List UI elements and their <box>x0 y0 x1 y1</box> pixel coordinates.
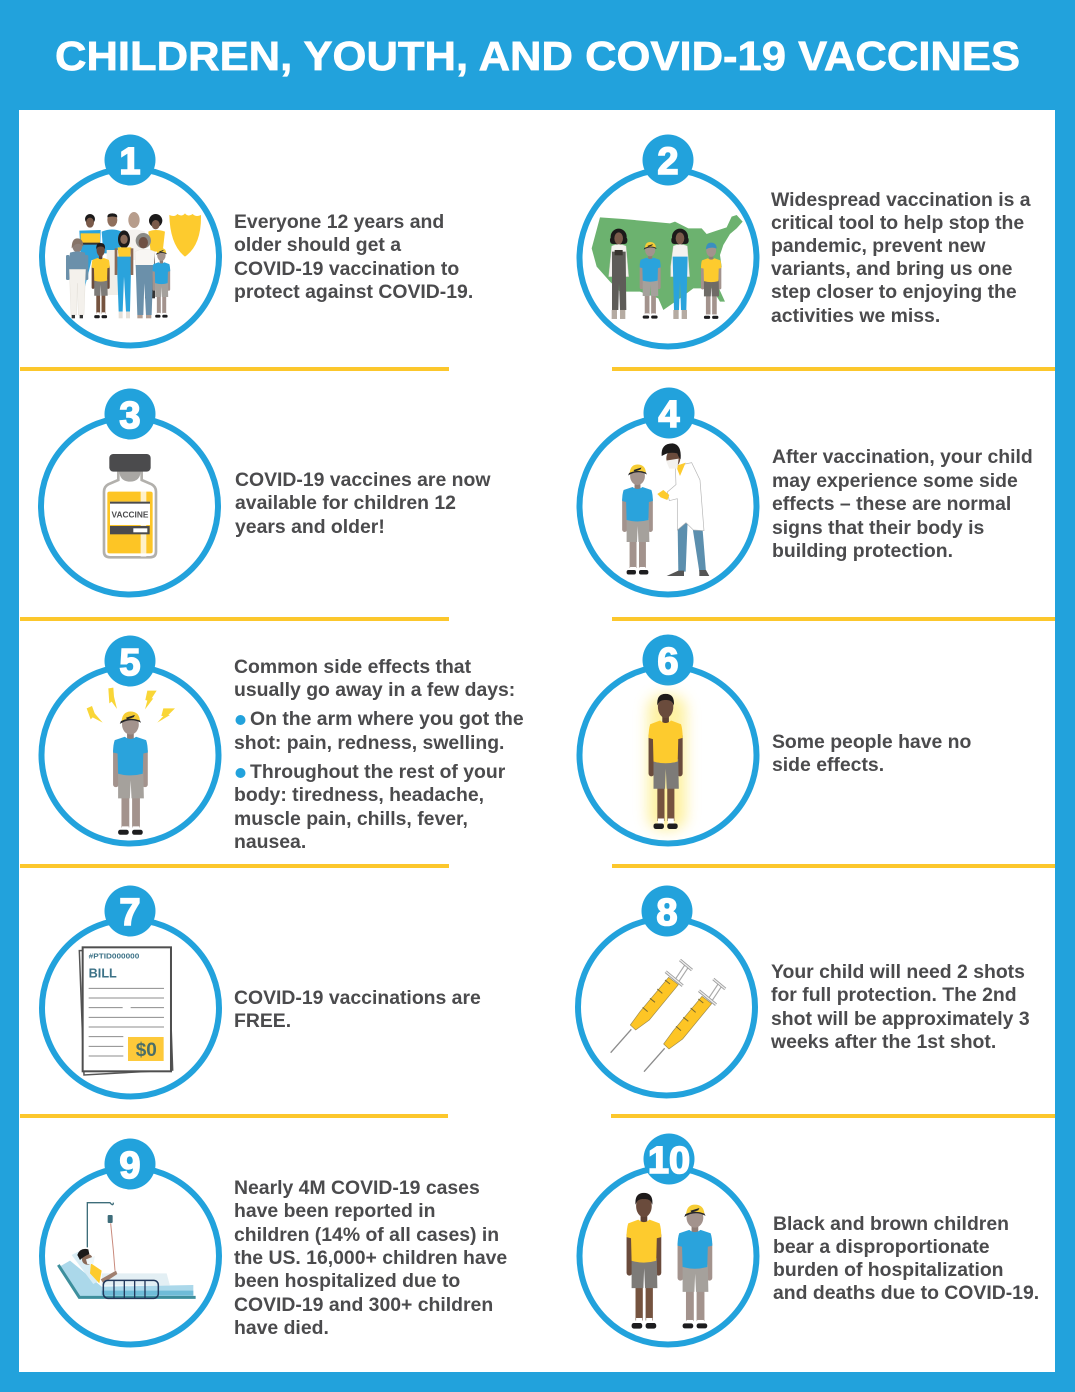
text 4: may experience some side <box>772 470 1018 492</box>
text 1: older should get a <box>234 234 401 256</box>
number badge 4: 4 <box>658 394 680 436</box>
text 1: Everyone 12 years and <box>234 211 444 233</box>
text 5: body: tiredness, headache, <box>234 784 484 806</box>
number badge 10: 10 <box>648 1140 690 1182</box>
text 1: protect against COVID-19. <box>234 281 473 303</box>
ring 5 <box>42 666 218 844</box>
icon: child with pain bolts <box>87 688 175 835</box>
text 10: burden of hospitalization <box>773 1259 1004 1281</box>
text 8: Your child will need 2 shots <box>771 961 1025 983</box>
panel 4: after vaccination <box>580 388 1033 594</box>
text 3: available for children 12 <box>235 492 456 514</box>
number badge 1: 1 <box>119 141 141 183</box>
title: CHILDREN, YOUTH, AND COVID-19 VACCINES <box>55 33 1020 79</box>
icon: healthy child with glow <box>648 694 686 830</box>
text 4: effects – these are normal <box>772 493 1011 515</box>
text 2: Widespread vaccination is a <box>771 189 1031 211</box>
number badge 5 <box>104 636 156 686</box>
text 2: critical tool to help stop the <box>771 212 1024 234</box>
text 8: weeks after the 1st shot. <box>770 1031 996 1053</box>
icon: family group with shield <box>66 212 201 318</box>
text 5: Throughout the rest of your <box>250 761 506 783</box>
panel 5: common side effects <box>42 636 524 853</box>
text 2: variants, and bring us one <box>771 258 1013 280</box>
number badge 1 <box>104 134 156 186</box>
syringe 1 <box>611 960 692 1053</box>
text 5: muscle pain, chills, fever, <box>234 808 468 830</box>
text 9: COVID-19 and 300+ children <box>234 1294 493 1316</box>
number badge 6 <box>642 634 694 686</box>
text 4: After vaccination, your child <box>772 446 1033 468</box>
number badge 6: 6 <box>657 641 679 683</box>
panel 10: disproportionate burden <box>580 1134 1039 1344</box>
ring 4 <box>580 418 756 594</box>
ring 7 <box>42 920 219 1096</box>
bill heading: BILL <box>89 967 117 981</box>
panel 6: no side effects <box>580 634 971 844</box>
text 5: On the arm where you got the <box>250 708 524 730</box>
text 6: Some people have no <box>772 731 971 753</box>
number badge 8 <box>642 886 692 936</box>
zero price: $0 <box>136 1040 157 1061</box>
text 8: shot will be approximately 3 <box>771 1008 1030 1030</box>
icon: doctor vaccinating child <box>622 443 709 576</box>
text 10: Black and brown children <box>773 1213 1009 1235</box>
number badge 10 <box>644 1134 694 1184</box>
panel 3: vaccines available <box>41 388 491 594</box>
text 9: been hospitalized due to <box>234 1270 460 1292</box>
text 5: Common side effects that <box>234 656 472 678</box>
ring 2 <box>580 170 756 346</box>
icon: two syringes <box>611 960 725 1072</box>
text 2: pandemic, prevent new <box>771 235 986 257</box>
number badge 4 <box>644 388 694 438</box>
ring 6 <box>580 666 756 844</box>
text 9: the US. 16,000+ children have <box>234 1247 507 1269</box>
text 5: usually go away in a few days: <box>234 679 515 701</box>
number badge 5: 5 <box>119 642 141 684</box>
text 9: have died. <box>234 1317 329 1339</box>
panel 2: widespread vaccination <box>580 134 1031 346</box>
text 9: Nearly 4M COVID-19 cases <box>234 1177 480 1199</box>
text 5 <box>234 656 524 853</box>
number badge 7: 7 <box>119 892 141 934</box>
text 4: building protection. <box>772 540 953 562</box>
text 2: activities we miss. <box>771 305 940 327</box>
ring 10 <box>580 1168 756 1344</box>
icon: child in hospital bed <box>58 1203 196 1298</box>
text 6: side effects. <box>772 754 884 776</box>
ring 1 <box>42 168 219 346</box>
number badge 3 <box>104 388 156 440</box>
ring 3 <box>41 418 218 594</box>
panel 1: everyone vaccinated <box>42 134 473 346</box>
text 7: COVID-19 vaccinations are <box>234 987 481 1009</box>
icon: US map with four people <box>592 215 743 319</box>
bill id: #PTID000000 <box>89 952 139 961</box>
syringe 2 <box>644 979 725 1072</box>
number badge 2 <box>642 134 694 186</box>
text 3: COVID-19 vaccines are now <box>235 469 491 491</box>
panel 7: free vaccinations <box>42 886 481 1096</box>
icon: bill showing $0 <box>79 947 173 1075</box>
text 9: children (14% of all cases) in <box>234 1224 499 1246</box>
ring 9 <box>42 1168 219 1344</box>
text 2: step closer to enjoying the <box>771 281 1017 303</box>
panel 9: cases and hospitalizations <box>42 1138 507 1344</box>
text 10: bear a disproportionate <box>773 1236 990 1258</box>
panel 8: two shots <box>578 886 1030 1096</box>
text 5: shot: pain, redness, swelling. <box>234 732 504 754</box>
ring 8 <box>578 918 755 1096</box>
icon: vaccine vial <box>104 454 156 557</box>
text 1: COVID-19 vaccination to <box>234 258 459 280</box>
vial label: VACCINE <box>112 509 149 519</box>
number badge 2: 2 <box>657 141 679 183</box>
text 8: for full protection. The 2nd <box>771 984 1017 1006</box>
text 10: and deaths due to COVID-19. <box>773 1282 1039 1304</box>
bullet <box>236 715 246 725</box>
number badge 7 <box>104 886 156 936</box>
number badge 8: 8 <box>656 892 678 934</box>
number badge 3: 3 <box>119 395 141 437</box>
icon: two children <box>627 1193 712 1329</box>
number badge 9 <box>104 1138 156 1190</box>
bullet <box>236 768 246 778</box>
text 7: FREE. <box>234 1010 291 1032</box>
text 5: nausea. <box>234 831 306 853</box>
text 9: have been reported in <box>234 1200 436 1222</box>
number badge 9: 9 <box>119 1145 141 1187</box>
text 3: years and older! <box>235 516 385 538</box>
text 4: signs that their body is <box>772 517 984 539</box>
